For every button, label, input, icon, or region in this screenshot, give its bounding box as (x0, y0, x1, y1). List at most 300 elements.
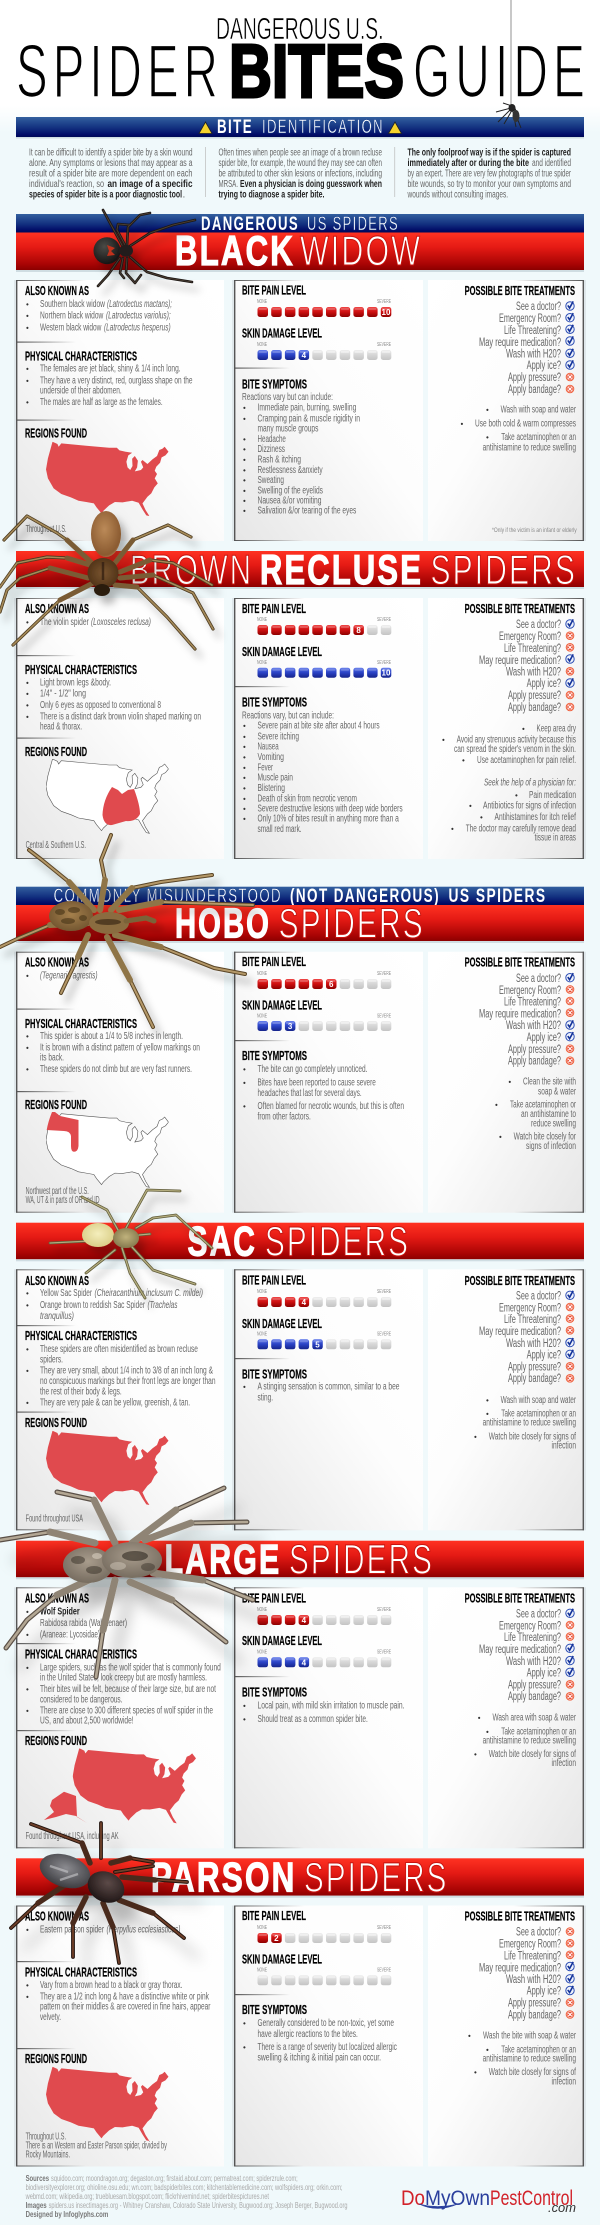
logo: DoMyOwnPestControl.com: .com (548, 2200, 576, 2215)
symptoms list: • (243, 804, 246, 813)
heading: BITE PAIN LEVEL (242, 954, 306, 969)
symptoms list: • (243, 1715, 246, 1724)
symptoms list: • (243, 1102, 246, 1111)
caption: Northwest part of the U.S. (26, 1186, 89, 1197)
symptoms list (243, 1700, 404, 1725)
physical characteristics list: They are a 1/2 inch long & have a distinctive white or pink (40, 1991, 210, 2002)
meter: skin 4: 4 (302, 1658, 307, 1667)
heading: BITE PAIN LEVEL (242, 282, 306, 298)
also known as list: Wolf Spider (40, 1606, 80, 1617)
physical characteristics list (26, 1344, 216, 1409)
banner: large spiders: SPIDERS (289, 1535, 434, 1582)
meter: pain 4: 4 (302, 1298, 307, 1307)
treatment notes: • (474, 1432, 477, 1441)
banner: brown recluse spiders: RECLUSE (260, 546, 423, 593)
map: whole US (46, 442, 168, 516)
symptoms list: Only 10% of bites result in anything more than a (258, 814, 399, 825)
heading: REGIONS FOUND (25, 1733, 87, 1748)
panel: sac levels (232, 1269, 423, 1530)
banner: bite identification (16, 117, 584, 138)
banner: dangerous us spiders (16, 214, 584, 235)
treatment notes: • (480, 813, 483, 822)
banner: bite identification: IDENTIFICATION (262, 117, 384, 138)
also known as list: Southern black widow (40, 299, 106, 310)
also known as list (26, 1288, 203, 1322)
panel: hobo treatments (428, 952, 586, 1213)
section: sac (14, 1218, 586, 1530)
symptoms list: • (243, 815, 246, 824)
heading: BITE PAIN LEVEL (242, 1908, 306, 1923)
meter: skin 5: 5 (315, 1340, 320, 1349)
symptoms list (243, 1382, 400, 1404)
also known as list (26, 1924, 180, 1935)
treatment notes (495, 1077, 576, 1152)
treatment notes: • (515, 791, 518, 800)
physical characteristics list: • (26, 1043, 29, 1052)
treatment notes: • (499, 1133, 502, 1142)
also known as list: Yellow Sac Spider (40, 1288, 92, 1299)
treatment checklist (479, 1927, 574, 2021)
treatment notes (474, 1395, 576, 1451)
symptoms list: • (243, 774, 246, 783)
physical characteristics list (26, 364, 193, 408)
heading: ALSO KNOWN AS (25, 954, 89, 970)
meter: pain 4 (257, 1607, 391, 1625)
meter: skin 4: 4 (302, 351, 307, 360)
treatment notes: reduce swelling (531, 1118, 576, 1129)
also known as list: (Latrodectus mactans); (107, 299, 172, 310)
meter: skin 10: 10 (382, 669, 391, 678)
treatment notes: • (486, 433, 489, 442)
physical characteristics list (26, 677, 201, 733)
text column 2: be attributed to other skin lesions or infections, including (218, 168, 382, 180)
spider: sac (50, 1190, 212, 1298)
banner: commonly misunderstood (16, 886, 584, 907)
symptoms list: Local pain, with mild skin irritation to muscle pain. (258, 1700, 404, 1711)
banner: commonly misunderstood: COMMONLY MISUNDERSTOOD (54, 886, 282, 907)
section: parson (14, 1854, 586, 2166)
banner: commonly misunderstood: US SPIDERS (448, 886, 546, 907)
banner: sac spiders: SAC (188, 1218, 257, 1265)
panel: sac identity (14, 1269, 224, 1530)
footer sources: Designed by Infoglyphs.com (26, 2210, 108, 2219)
heading: BITE SYMPTOMS (242, 376, 307, 392)
treatment notes: signs of infection (526, 1141, 576, 1152)
banner: black widow: BLACK (175, 227, 295, 274)
symptoms list: • (243, 2019, 246, 2028)
physical characteristics list: It is brown with a distinct pattern of yellow markings on (40, 1042, 200, 1053)
text column 2: Often times when people see an image of a brown recluse (218, 148, 382, 158)
meter: pain 10: SEVERE (377, 299, 391, 305)
symptoms list: swelling & itching & initial pain can occur. (258, 2052, 381, 2063)
spider: hobo (0, 835, 253, 1027)
physical characteristics list: • (26, 701, 29, 710)
meter: pain 8: SEVERE (377, 617, 391, 623)
heading: PHYSICAL CHARACTERISTICS (25, 1646, 137, 1662)
treatment notes: • (468, 2032, 471, 2041)
heading: REGIONS FOUND (25, 1097, 87, 1112)
caption: There is an Western and Easter Parson spider, divided by (26, 2140, 167, 2151)
symptoms list: • (243, 404, 246, 413)
symptoms list: Reactions vary but can include: (242, 392, 333, 403)
heading: SKIN DAMAGE LEVEL (242, 1952, 322, 1966)
panel: brown recluse levels (232, 598, 423, 859)
text column 1 (29, 148, 193, 200)
meter: pain 4: SEVERE (377, 1289, 391, 1295)
spider: black widow (94, 210, 195, 286)
physical characteristics list (26, 1980, 211, 2023)
physical characteristics list: its back. (40, 1053, 64, 1064)
meter: pain 4: NONE (257, 1607, 267, 1613)
symptoms list: Nausea (258, 742, 279, 753)
physical characteristics list: • (26, 1399, 29, 1408)
section: hobo (14, 886, 586, 1213)
title: SPIDER (16, 29, 223, 113)
also known as list: • (26, 618, 29, 627)
symptoms list: many muscle groups (258, 424, 318, 435)
banner: black widow (16, 227, 584, 274)
heading: PHYSICAL CHARACTERISTICS (25, 1016, 137, 1031)
heading: REGIONS FOUND (25, 426, 87, 440)
treatment notes: • (486, 2045, 489, 2054)
banner: dangerous us spiders: DANGEROUS (201, 214, 299, 235)
panel: hobo levels (232, 952, 423, 1213)
treatment notes: infection (552, 2076, 576, 2087)
banner: brown recluse spiders (16, 546, 584, 593)
symptoms list: Generally considered to be non-toxic, yet some (258, 2018, 394, 2029)
meter: skin 10: NONE (257, 660, 267, 666)
banner: hobo spiders (16, 899, 584, 946)
logo: DoMyOwnPestControl.com: Do (401, 2187, 425, 2210)
symptoms list: • (243, 1079, 246, 1088)
panel: black widow levels (232, 280, 423, 541)
meter: skin 4: NONE (257, 1650, 267, 1656)
symptoms list: Reactions vary, but can include: (242, 710, 334, 721)
symptoms list: small red mark. (258, 824, 302, 835)
heading: ALSO KNOWN AS (25, 601, 89, 616)
map: northwest US (46, 1112, 168, 1187)
meter: skin 10 (257, 660, 391, 678)
physical characteristics list: Their bites will be felt, because of their large size, but are not (40, 1684, 216, 1695)
title: BITES (229, 29, 404, 113)
physical characteristics list: They are very small, about 1/4 inch to 3/8 of an inch long & (40, 1366, 213, 1377)
symptoms list: Headache (258, 434, 286, 445)
meter: skin 3 (257, 1014, 391, 1031)
meter: pain 4: NONE (257, 1289, 267, 1295)
heading: BITE PAIN LEVEL (242, 1272, 306, 1288)
meter: skin 0: NONE (257, 1968, 267, 1974)
banner: large spiders: LARGE (165, 1535, 281, 1582)
treatment notes: • (474, 1750, 477, 1759)
heading: BITE SYMPTOMS (242, 1684, 307, 1700)
caption: WA, UT & in parts of OR and ID (26, 1195, 100, 1206)
footer sources (25, 2174, 348, 2219)
text column 3: wounds without consulting images. (407, 190, 508, 200)
physical characteristics list: in the United States, look creepy but are mostly harmless. (40, 1673, 207, 1684)
physical characteristics list: The males are half as large as the females. (40, 397, 163, 408)
banner: large spiders (16, 1535, 584, 1582)
meter: pain 10 (257, 299, 391, 317)
symptoms list: • (243, 435, 246, 444)
also known as list: The violin spider (40, 617, 89, 628)
heading: SKIN DAMAGE LEVEL (242, 1316, 322, 1331)
also known as list: (Cheiracanthium inclusum C. mildei) (94, 1288, 203, 1299)
text column 1: . (182, 190, 185, 200)
heading: PHYSICAL CHARACTERISTICS (25, 662, 137, 677)
treatment notes: infection (552, 1758, 576, 1769)
symptoms list: Death of skin from necrotic venom (258, 793, 357, 804)
physical characteristics list: There is a distinct dark brown violin shaped marking on (40, 712, 201, 723)
logo: DoMyOwnPestControl.com (401, 2187, 576, 2215)
panel: large treatments (428, 1587, 586, 1848)
banner: black widow: WIDOW (300, 227, 422, 274)
meter: pain 6 (257, 971, 391, 989)
also known as list: Orange brown to reddish Sac Spider (40, 1300, 145, 1311)
meter: skin 0: SEVERE (377, 1968, 391, 1974)
meter: pain 6: NONE (257, 971, 267, 977)
panel: sac treatments (428, 1269, 586, 1530)
physical characteristics list: Large spiders, such as the wolf spider that is commonly found (40, 1662, 221, 1673)
meter: pain 10: NONE (257, 299, 267, 305)
symptoms list: Salivation &/or tearing of the eyes (258, 506, 356, 517)
icon: small hanging spider (496, 0, 521, 128)
meter: skin 4: SEVERE (377, 1650, 391, 1656)
also known as list: (Loxosceles reclusa) (91, 617, 151, 628)
meter: pain 4: SEVERE (377, 1607, 391, 1613)
meter: pain 2 (257, 1925, 391, 1943)
treatment checklist (479, 1290, 574, 1385)
symptoms list: Rash & itching (258, 454, 301, 465)
footer sources: webmd.com; wikipedia.org; truebluesam.blogspot.com; flickrhivemind.net; spiderbitespictures.net (25, 2192, 270, 2201)
treatment notes: • (486, 1396, 489, 1405)
heading: ALSO KNOWN AS (25, 283, 89, 298)
meter: pain 8: 8 (356, 626, 361, 635)
banner: parson spiders: PARSON (151, 1854, 297, 1901)
physical characteristics list: spiders. (40, 1354, 63, 1365)
caption (26, 2131, 167, 2160)
physical characteristics list: They are very pale & can be yellow, greenish, & tan. (40, 1398, 190, 1409)
symptoms list: Bites have been reported to cause severe (258, 1078, 376, 1089)
meter: skin 0 (257, 1968, 391, 1985)
physical characteristics list: These spiders do not climb but are very fast runners. (40, 1064, 192, 1075)
symptoms list: • (243, 1383, 246, 1392)
text column 3 (407, 148, 571, 200)
physical characteristics list: There are close to 300 different species of wolf spider in the (40, 1706, 213, 1717)
banner: sac spiders (16, 1218, 584, 1265)
meter: pain 4: 4 (302, 1616, 307, 1625)
heading: BITE SYMPTOMS (242, 1048, 307, 1063)
meter: skin 5 (257, 1332, 391, 1349)
also known as list: (Araneae: Lycosidae) (40, 1629, 100, 1640)
heading: ALSO KNOWN AS (25, 1273, 89, 1288)
physical characteristics list: Only 6 eyes as opposed to conventional 8 (40, 700, 161, 711)
treatment checklist (479, 1608, 574, 1703)
symptoms list: headaches that last for several days. (258, 1088, 362, 1099)
text column 2: spider bite, for example, the wound they may see can often (218, 158, 382, 169)
symptoms list: • (243, 445, 246, 454)
symptoms list: Severe destructive lesions with deep wide borders (258, 803, 403, 814)
logo: DoMyOwnPestControl.com: PestControl (490, 2187, 573, 2210)
also known as list: • (26, 1289, 29, 1298)
symptoms list: Swelling of the eyelids (258, 485, 323, 496)
symptoms list: • (243, 753, 246, 762)
symptoms list: Cramping pain & muscle rigidity in (258, 413, 360, 424)
heading: PHYSICAL CHARACTERISTICS (25, 1964, 137, 1980)
heading: BITE PAIN LEVEL (242, 601, 306, 616)
treatment notes: • (486, 406, 489, 415)
also known as list: • (26, 972, 29, 981)
physical characteristics list: • (26, 1685, 29, 1694)
physical characteristics list: no conspicuous markings but their front legs are longer than (40, 1376, 216, 1387)
panel: parson treatments (428, 1906, 586, 2166)
treatment notes: • (474, 2068, 477, 2077)
map: central and southern US (46, 759, 168, 833)
treatment notes: Pain medication (529, 790, 576, 801)
also known as list: • (26, 1301, 29, 1310)
caption: Found throughout USA (26, 1514, 83, 1525)
physical characteristics list: The females are jet black, shiny & 1/4 inch long. (40, 364, 181, 375)
symptoms list (243, 2018, 397, 2063)
symptoms list: • (243, 476, 246, 485)
physical characteristics list (26, 1031, 200, 1075)
symptoms list: Blistering (258, 783, 285, 794)
also known as list: • (26, 1925, 29, 1934)
text column 3: immediately after or during the bite (408, 158, 529, 169)
caption: Rocky Mountains. (26, 2149, 70, 2160)
also known as list: Northern black widow (40, 310, 104, 321)
physical characteristics list: • (26, 376, 29, 385)
symptoms list: Immediate pain, burning, swelling (258, 403, 356, 414)
physical characteristics list: • (26, 1032, 29, 1041)
also known as list (26, 299, 172, 333)
symptoms list: Dizziness (258, 444, 285, 455)
panel: brown recluse treatments (428, 598, 586, 859)
symptoms list: • (243, 743, 246, 752)
symptoms list (242, 710, 403, 835)
panel: bite identification (16, 117, 584, 200)
heading: REGIONS FOUND (25, 2051, 87, 2066)
heading: BITE SYMPTOMS (242, 694, 307, 710)
treatment notes: • (451, 824, 454, 833)
text column 2: MRSA. (218, 179, 238, 190)
panel: hobo identity (14, 952, 224, 1213)
also known as list: (Herpyllus ecclesiasticus) (106, 1924, 180, 1935)
heading: ALSO KNOWN AS (25, 1590, 89, 1606)
heading: BITE SYMPTOMS (242, 1366, 307, 1382)
physical characteristics list: Vary from a brown head to a black or gray thorax. (40, 1980, 182, 1991)
banner: hobo spiders: HOBO (175, 899, 271, 946)
physical characteristics list: considered to be dangerous. (40, 1694, 122, 1705)
treatment notes: • (478, 1714, 481, 1723)
footer sources: squidoo.com; moondragon.org; degaston.org; firstaid.about.com; permatreat.com; spiderzrule.com; (51, 2174, 298, 2183)
treatment notes: • (486, 1727, 489, 1736)
also known as list: (Latrodectus hesperus) (104, 322, 171, 333)
text column 2 (218, 148, 382, 200)
banner: dangerous us spiders: US SPIDERS (307, 214, 399, 235)
also known as list: (Tegenaria agrestis) (40, 971, 98, 982)
treatment notes: soap & water (538, 1086, 576, 1097)
physical characteristics list: • (26, 678, 29, 687)
text column 1: species of spider bite is a poor diagnostic tool (29, 190, 182, 200)
symptoms list: Severe itching (258, 732, 299, 743)
symptoms list: • (243, 414, 246, 423)
symptoms list (243, 1064, 404, 1123)
symptoms list: • (243, 486, 246, 495)
also known as list (26, 617, 151, 628)
panel: brown recluse identity (14, 598, 224, 859)
heading: SKIN DAMAGE LEVEL (242, 644, 322, 659)
physical characteristics list: Light brown legs &body. (40, 677, 111, 688)
symptoms list: • (243, 763, 246, 772)
symptoms list: • (243, 497, 246, 506)
meter: pain 6: SEVERE (377, 971, 391, 977)
footer sources: biodiversityexplorer.org; ohioline.osu.edu; wn.com; badspiderbites.com; kitchentablemedicine.com; wolfspiders.org; orkin.com; (26, 2183, 342, 2192)
symptoms list: • (243, 784, 246, 793)
physical characteristics list: • (26, 1345, 29, 1354)
also known as list: Eastern parson spider (40, 1924, 104, 1935)
symptoms list: Often blamed for necrotic wounds, but this is often (258, 1101, 404, 1112)
physical characteristics list: • (26, 713, 29, 722)
panel: large identity (14, 1587, 224, 1848)
map: US including Alaska (44, 1748, 196, 1823)
symptoms list: • (243, 466, 246, 475)
also known as list: Western black widow (40, 322, 102, 333)
physical characteristics list: the rest of their body & legs. (40, 1386, 122, 1397)
heading: SKIN DAMAGE LEVEL (242, 998, 322, 1012)
logo: DoMyOwnPestControl.com: MyOwn (425, 2187, 490, 2210)
physical characteristics list: • (26, 1367, 29, 1376)
treatment notes: • (495, 1100, 498, 1109)
meter: skin 3: SEVERE (377, 1014, 391, 1020)
treatment checklist (479, 973, 574, 1068)
physical characteristics list: This spider is about a 1/4 to 5/8 inches in length. (40, 1031, 183, 1042)
spider: large wolf (0, 1488, 253, 1677)
banner: commonly misunderstood: (NOT DANGEROUS) (290, 886, 440, 907)
physical characteristics list: • (26, 1707, 29, 1716)
meter: pain 2: NONE (257, 1925, 267, 1931)
text column 1: an image of a specific (108, 179, 193, 190)
symptoms list (242, 392, 360, 517)
also known as list (26, 971, 98, 982)
caption: Central & Southern U.S. (26, 840, 86, 851)
symptoms list: • (243, 1065, 246, 1074)
also known as list: tranquillus) (40, 1311, 74, 1322)
treatment notes: • (522, 724, 525, 733)
physical characteristics list: pattern on their middles & are covered in fine hairs, appear (40, 2002, 211, 2013)
spider: parson (11, 1823, 187, 1963)
meter: skin 5: NONE (257, 1332, 267, 1338)
panel: large levels (232, 1587, 423, 1848)
symptoms list: • (243, 2043, 246, 2052)
symptoms list: The bite can go completely unnoticed. (258, 1064, 367, 1075)
also known as list (26, 1606, 127, 1640)
also known as list: (Trachelas (148, 1300, 178, 1311)
banner: brown recluse spiders: BROWN (130, 546, 253, 593)
footer sources: spiders.us insectimages.org - Whitney Cranshaw, Colorado State University, Bugwood.org; Joseph Berger, Bugwood.org (49, 2201, 347, 2210)
heading: BITE PAIN LEVEL (242, 1590, 306, 1606)
symptoms list: Restlessness &anxiety (258, 465, 323, 476)
symptoms list: sting. (258, 1393, 273, 1404)
heading: ALSO KNOWN AS (25, 1908, 89, 1924)
symptoms list: • (243, 794, 246, 803)
treatment notes: • (442, 736, 445, 745)
title (16, 11, 590, 113)
heading: PHYSICAL CHARACTERISTICS (25, 348, 137, 364)
treatment notes: tissue in areas (535, 833, 576, 844)
section: black widow (14, 214, 586, 541)
meter: pain 2: 2 (274, 1934, 279, 1943)
symptoms list: Should treat as a common spider bite. (258, 1714, 368, 1725)
